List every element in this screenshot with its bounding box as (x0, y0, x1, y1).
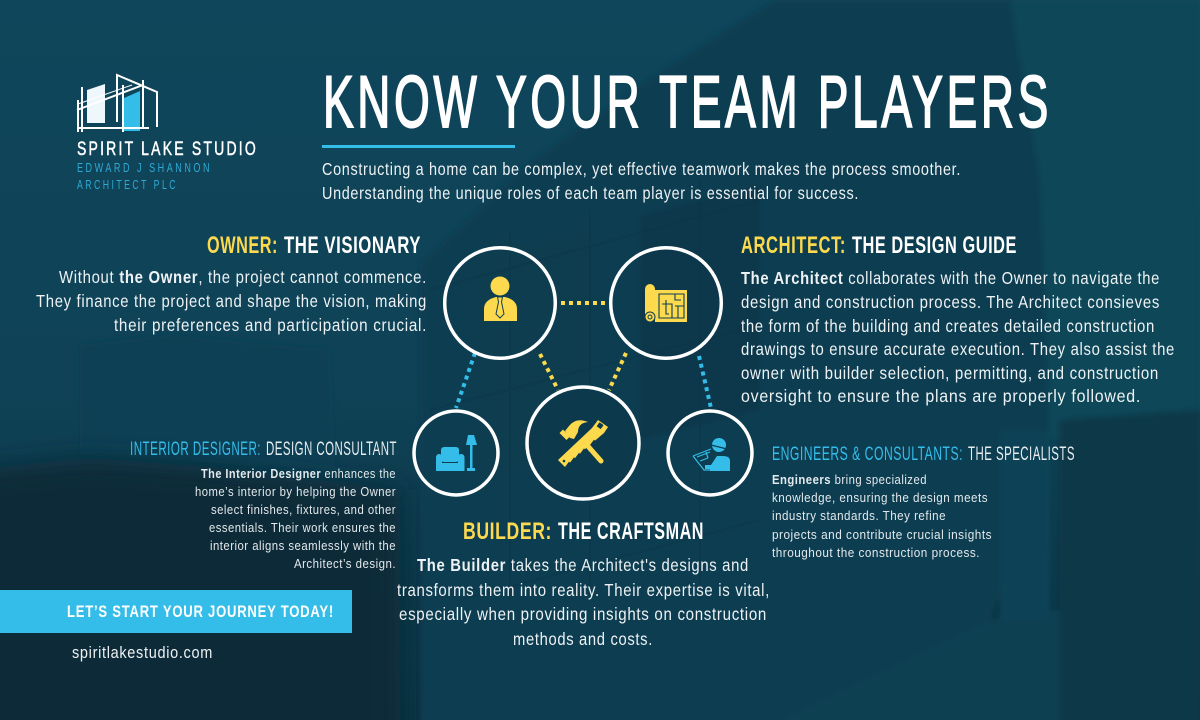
engineers heading: THE SPECIALISTS (968, 443, 1075, 465)
panel: builder (397, 518, 770, 649)
icon circle: engineer (668, 411, 752, 495)
interior designer text: interior aligns seamlessly with the (210, 538, 396, 553)
owner text: their preferences and participation crucial. (114, 315, 427, 335)
intro text: Understanding the unique roles of each team player is essential for success. (322, 183, 859, 203)
builder text: The Builder takes the Architect's designs and (417, 555, 749, 575)
icon circle: architect (611, 248, 721, 358)
engineers text: Engineers bring specialized (772, 472, 927, 487)
owner text: They finance the project and shape the vision, making (36, 291, 427, 311)
website: spiritlakestudio.com (72, 643, 213, 662)
logo subtitle line 1: EDWARD J SHANNON (77, 161, 212, 175)
icon: blueprint roll (645, 284, 687, 322)
owner heading (207, 232, 421, 259)
intro text: Constructing a home can be complex, yet effective teamwork makes the process smoother. (322, 159, 961, 179)
dotted connectors (456, 303, 711, 408)
icon: armchair and lamp (436, 435, 477, 471)
engineers text: industry standards. They refine (772, 508, 946, 523)
call to action banner: LET’S START YOUR JOURNEY TODAY! (67, 602, 334, 621)
interior designer heading: DESIGN CONSULTANT (266, 438, 397, 460)
call to action banner (0, 590, 352, 633)
architect heading: ARCHITECT: (741, 232, 846, 259)
builder heading: BUILDER: (463, 518, 552, 545)
engineers text (772, 472, 992, 560)
panel: architect (741, 232, 1175, 406)
interior designer text: Architect’s design. (294, 556, 396, 571)
intro text (322, 159, 961, 203)
architect heading (741, 232, 1017, 259)
icon: engineer at drawing board (693, 438, 730, 471)
owner heading: THE VISIONARY (284, 232, 421, 259)
icon circle: builder (527, 387, 639, 499)
panel: owner (36, 232, 427, 335)
builder text: methods and costs. (513, 629, 653, 649)
engineers text: throughout the construction process. (772, 545, 980, 560)
builder heading: THE CRAFTSMAN (558, 518, 704, 545)
engineers text: projects and contribute crucial insights (772, 527, 992, 542)
interior designer text: essentials. Their work ensures the (209, 520, 396, 535)
interior designer heading: INTERIOR DESIGNER: (130, 438, 261, 460)
architect text: oversight to ensure the plans are properly followed. (741, 386, 1141, 406)
logo mark (77, 75, 157, 132)
title underline (322, 145, 515, 148)
owner text (36, 267, 427, 335)
icon: owner person with tie (484, 276, 517, 321)
interior designer text: select finishes, fixtures, and other (211, 502, 396, 517)
builder text: transforms them into reality. Their expertise is vital, (397, 580, 770, 600)
interior designer text (195, 466, 396, 571)
interior designer text: home’s interior by helping the Owner (195, 484, 396, 499)
architect text (741, 268, 1175, 406)
engineers heading: ENGINEERS & CONSULTANTS: (772, 443, 963, 465)
logo: Spirit Lake Studio (77, 75, 258, 192)
builder text: especially when providing insights on construction (399, 604, 767, 624)
logo subtitle line 2: ARCHITECT PLC (77, 178, 178, 192)
builder text (397, 555, 770, 649)
icon circle: interior designer (414, 411, 498, 495)
engineers text: knowledge, ensuring the design meets (772, 490, 988, 505)
logo name: SPIRIT LAKE STUDIO (77, 139, 258, 160)
owner text: Without the Owner, the project cannot commence. (59, 267, 427, 287)
panel: interior designer (130, 438, 397, 571)
owner heading: OWNER: (207, 232, 278, 259)
icon circle: owner (445, 248, 555, 358)
architect heading: THE DESIGN GUIDE (852, 232, 1017, 259)
interior designer text: The Interior Designer enhances the (201, 466, 396, 481)
builder heading (463, 518, 704, 545)
icon: hammer and saw (558, 420, 608, 467)
panel: engineers and consultants (772, 443, 1075, 560)
